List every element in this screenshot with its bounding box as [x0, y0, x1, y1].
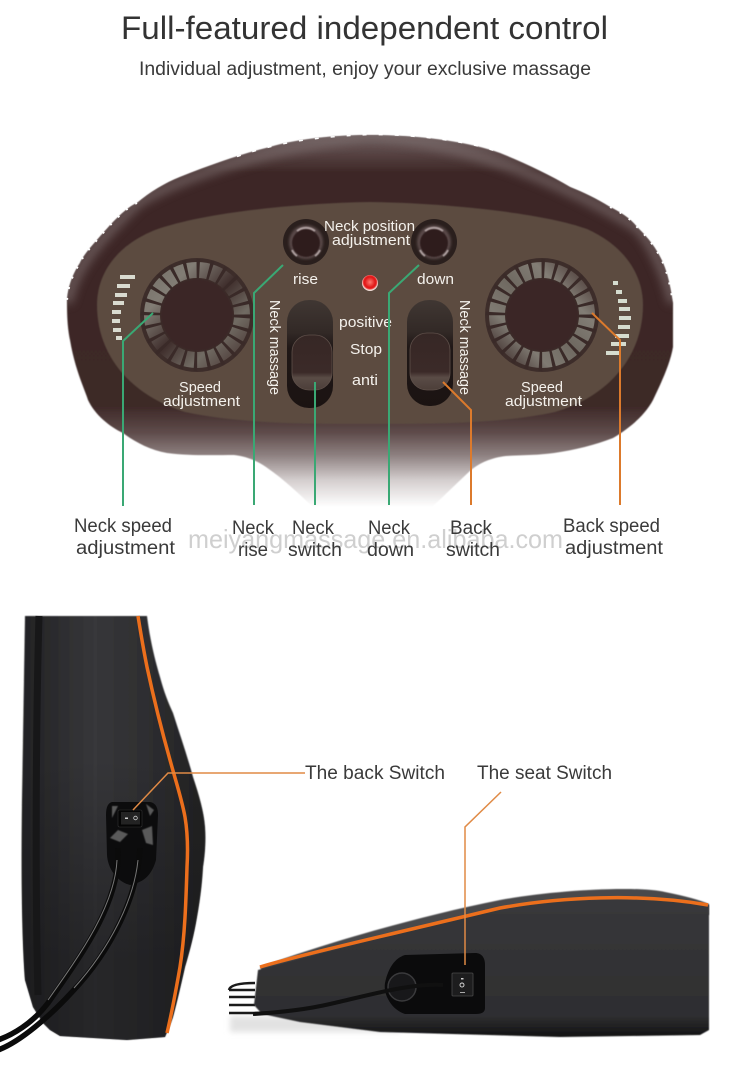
seat cushion photo — [229, 889, 709, 1037]
callout labels: switch — [446, 540, 500, 561]
panel labels: adjustment — [163, 393, 241, 410]
panel labels: Neck massage — [266, 300, 283, 395]
callout labels: adjustment — [565, 538, 664, 559]
orange leader lines — [443, 313, 620, 505]
orange piping — [260, 898, 708, 967]
power cable — [253, 985, 443, 1014]
right speed knob — [485, 258, 599, 372]
panel labels: down — [417, 271, 454, 288]
panel labels: Speed — [179, 379, 221, 396]
neck switch — [287, 300, 333, 408]
indicator light — [362, 275, 378, 291]
callout labels: adjustment — [76, 538, 176, 559]
seat shadow — [230, 1016, 400, 1032]
callout labels: switch — [288, 540, 342, 561]
power cables — [0, 848, 140, 1050]
neck down button — [411, 219, 457, 265]
callout labels: Back — [450, 518, 492, 539]
title: Full-featured independent control — [121, 10, 608, 46]
callout labels: rise — [238, 540, 268, 561]
cushion body — [22, 616, 205, 1040]
watermark: meiyangmassage.en.alibaba.com — [188, 524, 563, 554]
panel labels — [163, 218, 583, 410]
top serrated edge — [237, 134, 500, 156]
seat top surface — [260, 889, 709, 972]
switch plate — [385, 953, 485, 1014]
controller photo — [67, 134, 673, 507]
scalloped left edge — [67, 203, 137, 303]
body rim highlight — [67, 135, 673, 303]
callout labels: Neck — [368, 518, 410, 539]
panel labels: Stop — [350, 341, 382, 358]
panel labels: adjustment — [332, 232, 411, 249]
plate highlights — [110, 804, 154, 845]
callout labels: Back speed — [563, 516, 660, 537]
panel labels: Neck massage — [456, 300, 473, 395]
panel labels: positive — [339, 314, 392, 331]
panel labels: anti — [352, 372, 378, 389]
callout labels: Neck — [292, 518, 334, 539]
back switch label: The back Switch — [305, 763, 445, 784]
seat body — [254, 899, 709, 1037]
seat switch leader line — [465, 792, 501, 965]
neck rise button — [283, 219, 329, 265]
left speed bars — [112, 277, 135, 338]
callout labels: Neck speed — [74, 516, 172, 537]
right speed bars — [606, 283, 631, 353]
panel labels: adjustment — [505, 393, 583, 410]
cushion lower shading — [22, 760, 205, 1040]
back cushion photo — [0, 616, 205, 1050]
orange piping — [138, 616, 188, 1033]
scalloped right edge — [610, 207, 673, 303]
panel labels: rise — [293, 271, 318, 288]
controller body — [67, 135, 673, 507]
callout labels: down — [367, 540, 414, 561]
callout labels — [74, 516, 664, 561]
back switch leader line — [133, 773, 305, 810]
wires at left — [229, 983, 258, 1013]
switch plate — [106, 802, 158, 885]
plate socket — [388, 973, 416, 1001]
callout labels: Neck — [232, 518, 274, 539]
back switch — [407, 300, 453, 406]
seat switch label: The seat Switch — [477, 763, 612, 784]
rocker switch — [452, 973, 473, 996]
control panel — [97, 202, 643, 424]
rocker switch — [118, 810, 142, 827]
panel labels: Speed — [521, 379, 563, 396]
subtitle: Individual adjustment, enjoy your exclusive massage — [139, 59, 591, 80]
left speed knob — [140, 258, 254, 372]
green leader lines — [123, 265, 419, 506]
panel labels: Neck position — [324, 218, 415, 235]
zip seam — [36, 616, 39, 995]
